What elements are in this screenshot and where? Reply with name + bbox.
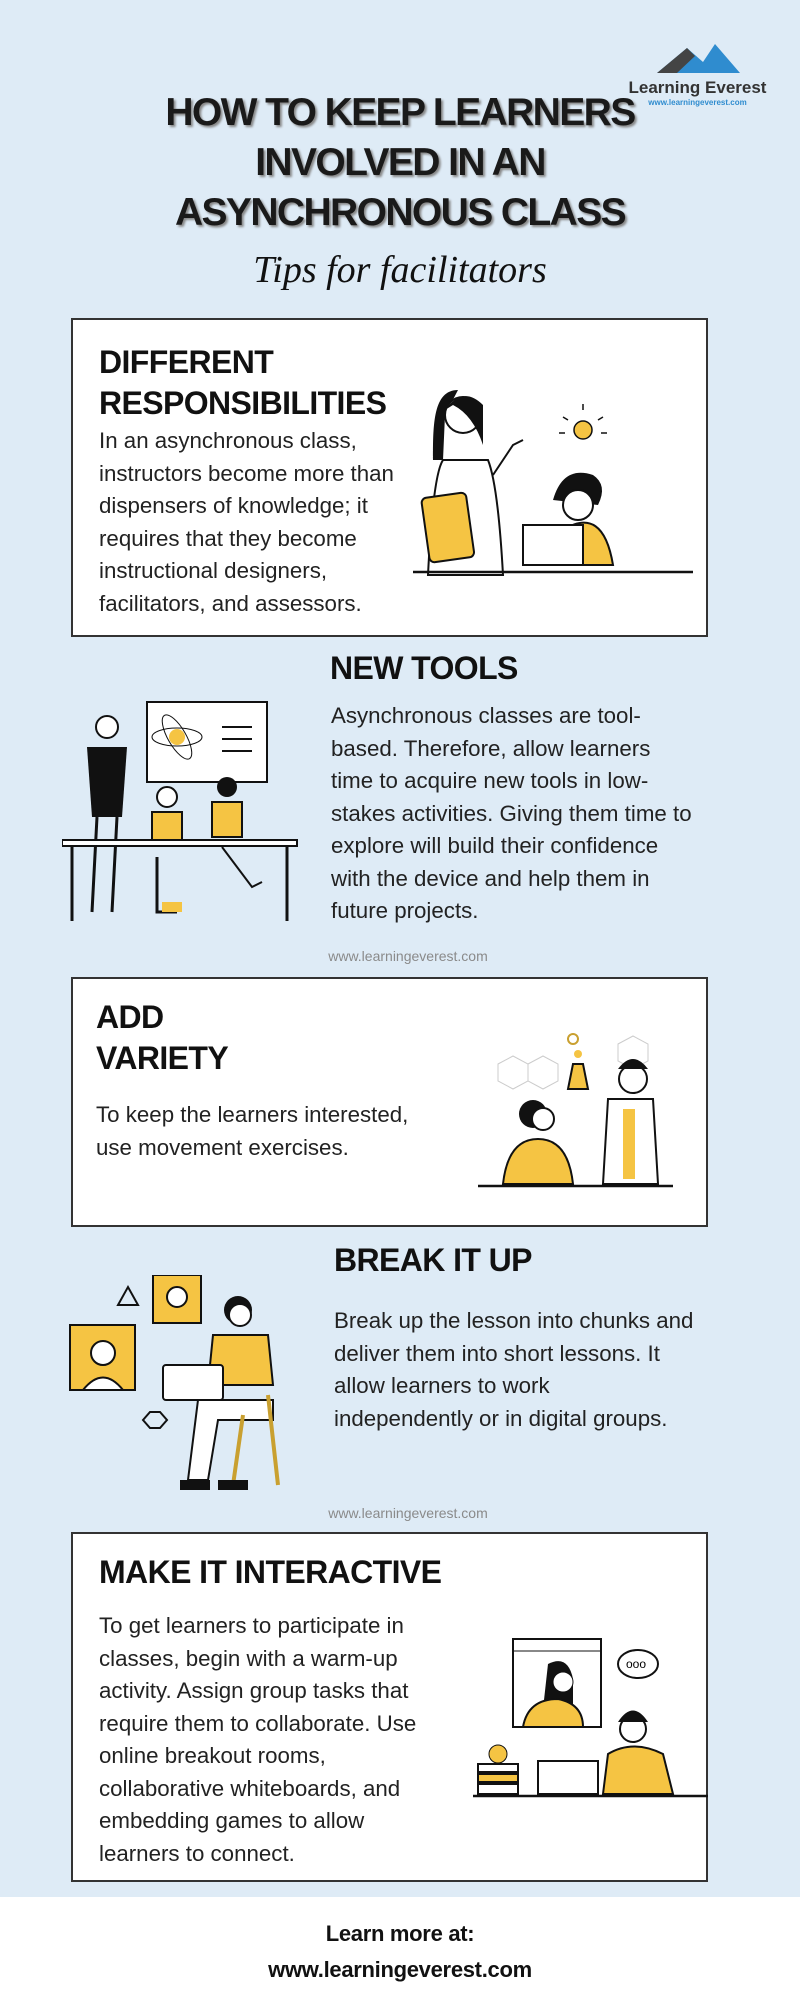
logo: www.learningeverest.com [648,98,747,107]
footer: Learn more at: [326,1921,474,1946]
text block: learners to connect. [99,1840,295,1866]
heading: new tools: NEW TOOLS [330,650,518,686]
watermark: www.learningeverest.com [328,1505,488,1521]
illustration: video call [473,1638,708,1798]
text block: collaborative whiteboards, and [99,1776,400,1800]
text block: break it up: deliver them into short lessons. It [334,1340,660,1366]
text block: instructional designers, [99,558,327,583]
text block: facilitators, and assessors. [99,590,362,616]
text block: new tools [331,703,692,923]
heading: MAKE IT INTERACTIVE [99,1554,441,1590]
text block: new tools: time to acquire new tools in low- [331,768,648,793]
text block: In an asynchronous class, [99,428,357,453]
heading [99,344,386,421]
text block [99,1613,416,1866]
footer: www.learningeverest.com [268,1957,532,1982]
text block: break it up: independently or in digital groups. [334,1406,667,1430]
panel: add variety [71,977,708,1227]
panel: make it interactive [71,1532,708,1882]
panel: different responsibilities [71,318,708,637]
text block: embedding games to allow [99,1808,364,1833]
logo: Learning Everest [629,78,766,97]
footer [0,1897,800,2000]
heading: break it up: BREAK IT UP [334,1242,532,1278]
text block: online breakout rooms, [99,1743,326,1768]
illustration: lab scene [478,1033,673,1188]
text block: new tools: Asynchronous classes are tool- [331,703,641,728]
text block: dispensers of knowledge; it [99,493,368,518]
text block: new tools: based. Therefore, allow learners [331,736,650,760]
text block: use movement exercises. [96,1134,349,1160]
text block: To get learners to participate in [99,1613,404,1638]
watermark: www.learningeverest.com [328,948,488,964]
heading: VARIETY [96,1040,228,1076]
illustration: team at whiteboard [62,701,298,921]
text block: activity. Assign group tasks that [99,1678,408,1703]
title [165,91,638,234]
text block: new tools: future projects. [331,898,478,923]
text block [96,1102,408,1160]
heading [96,999,228,1076]
text block: break it up: allow learners to work [334,1373,550,1398]
text block: requires that they become [99,526,357,550]
text block: To keep the learners interested, [96,1102,408,1127]
text block: new tools: explore will build their confidence [331,833,658,858]
illustration: teacher and student [413,390,693,576]
text block: require them to collaborate. Use [99,1710,416,1736]
text block: new tools: with the device and help them in [331,866,650,890]
text block: new tools: stakes activities. Giving them time to [331,800,692,826]
text block [99,428,394,616]
logo [629,44,766,107]
title: HOW TO KEEP LEARNERS [165,91,635,134]
text block: classes, begin with a warm-up [99,1646,398,1670]
text block: break it up: Break up the lesson into chunks and [334,1308,693,1333]
heading: DIFFERENT [99,344,273,380]
title: INVOLVED IN AN [255,141,545,184]
illustration: video call: ooo [626,1657,646,1671]
text block: instructors become more than [99,460,394,486]
heading: RESPONSIBILITIES [99,385,386,421]
text block: break it up [334,1308,693,1430]
illustration: remote work [69,1275,280,1490]
heading: ADD [96,999,164,1035]
subtitle: Tips for facilitators [253,249,547,291]
title: ASYNCHRONOUS CLASS [175,191,625,234]
